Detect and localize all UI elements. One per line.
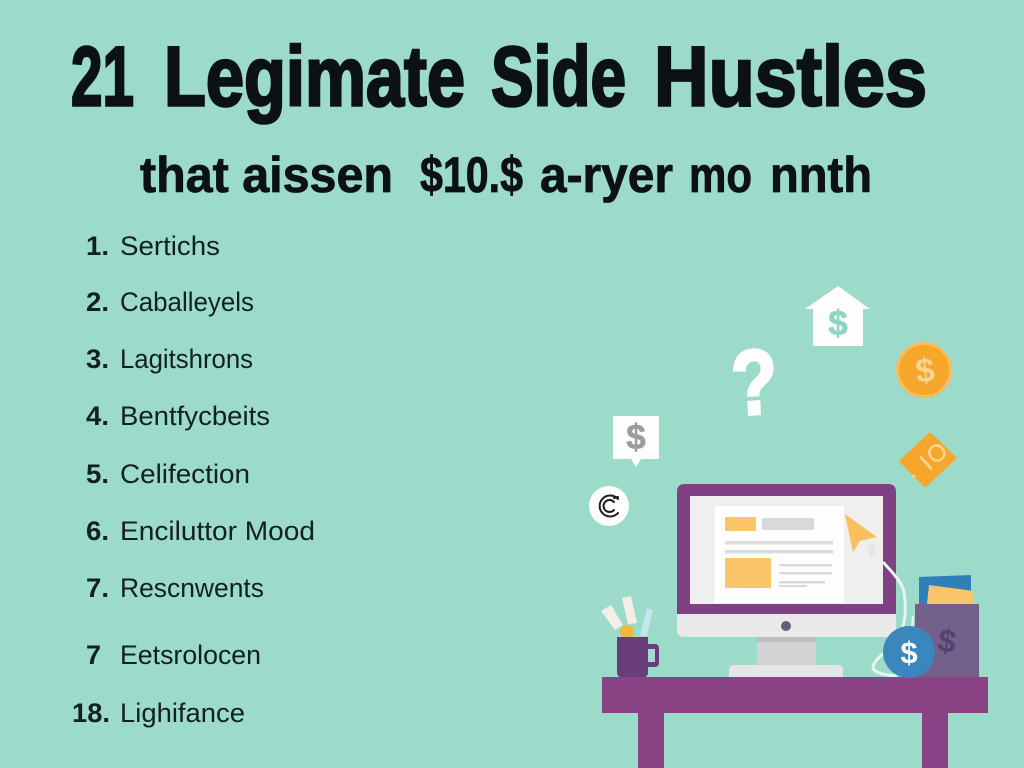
screen [690, 496, 883, 604]
list item 2: 2. [86, 287, 109, 317]
list item 8: 7 [86, 640, 101, 670]
list item 6: 6. [86, 516, 109, 546]
icon: dollar speech bubble: $ [626, 418, 646, 457]
list item 1: 1. [86, 231, 109, 261]
power button [781, 621, 791, 631]
subtitle [140, 147, 872, 203]
list item 8: Eetsrolocen [120, 640, 261, 670]
monitor [677, 484, 896, 677]
icon: blue dollar coin [883, 626, 935, 678]
desk [602, 677, 988, 768]
monitor chin [677, 614, 896, 637]
folder box with dollar: $ [936, 622, 959, 660]
monitor stand [729, 637, 843, 677]
icon: question mark: ? [729, 330, 780, 435]
pen mug [601, 596, 659, 677]
icon: gold coin [896, 342, 952, 398]
list item 6: Enciluttor Mood [120, 516, 315, 546]
list item 3: 3. [86, 344, 109, 374]
icon: blue dollar coin: $ [900, 635, 918, 670]
cursor with cable [845, 514, 913, 676]
list item 4: Bentfycbeits [120, 401, 270, 431]
icon: gold coin: $ [914, 351, 937, 391]
monitor frame [677, 484, 896, 614]
list item 2: Caballeyels [120, 287, 254, 317]
subtitle: a-ryer [540, 147, 673, 203]
icon: spiral badge [589, 486, 629, 526]
icon: house with dollar [805, 286, 870, 346]
icon: dollar speech bubble [613, 416, 659, 467]
title: Hustles [654, 30, 927, 124]
icon: orange price tag: · IO [901, 436, 955, 488]
list item 9: 18. [72, 698, 110, 728]
web page [715, 506, 844, 603]
numbered list [72, 231, 315, 728]
list item 9: Lighifance [120, 698, 245, 728]
subtitle: nnth [770, 147, 872, 203]
list item 4: 4. [86, 401, 109, 431]
list item 5: 5. [86, 459, 109, 489]
list item 3: Lagitshrons [120, 344, 253, 374]
list item 1: Sertichs [120, 231, 220, 261]
subtitle: $10.$ [420, 147, 523, 203]
list item 5: Celifection [120, 459, 250, 489]
list item 7: Rescnwents [120, 573, 264, 603]
folder box with dollar [915, 575, 979, 677]
subtitle: that aissen [140, 147, 393, 203]
list item 7: 7. [86, 573, 109, 603]
title: Legimate [164, 30, 465, 124]
subtitle: mo [689, 147, 752, 203]
title: 21 [71, 30, 134, 124]
icon: house with dollar: $ [828, 304, 848, 343]
title [71, 30, 927, 124]
title: Side [491, 30, 626, 124]
